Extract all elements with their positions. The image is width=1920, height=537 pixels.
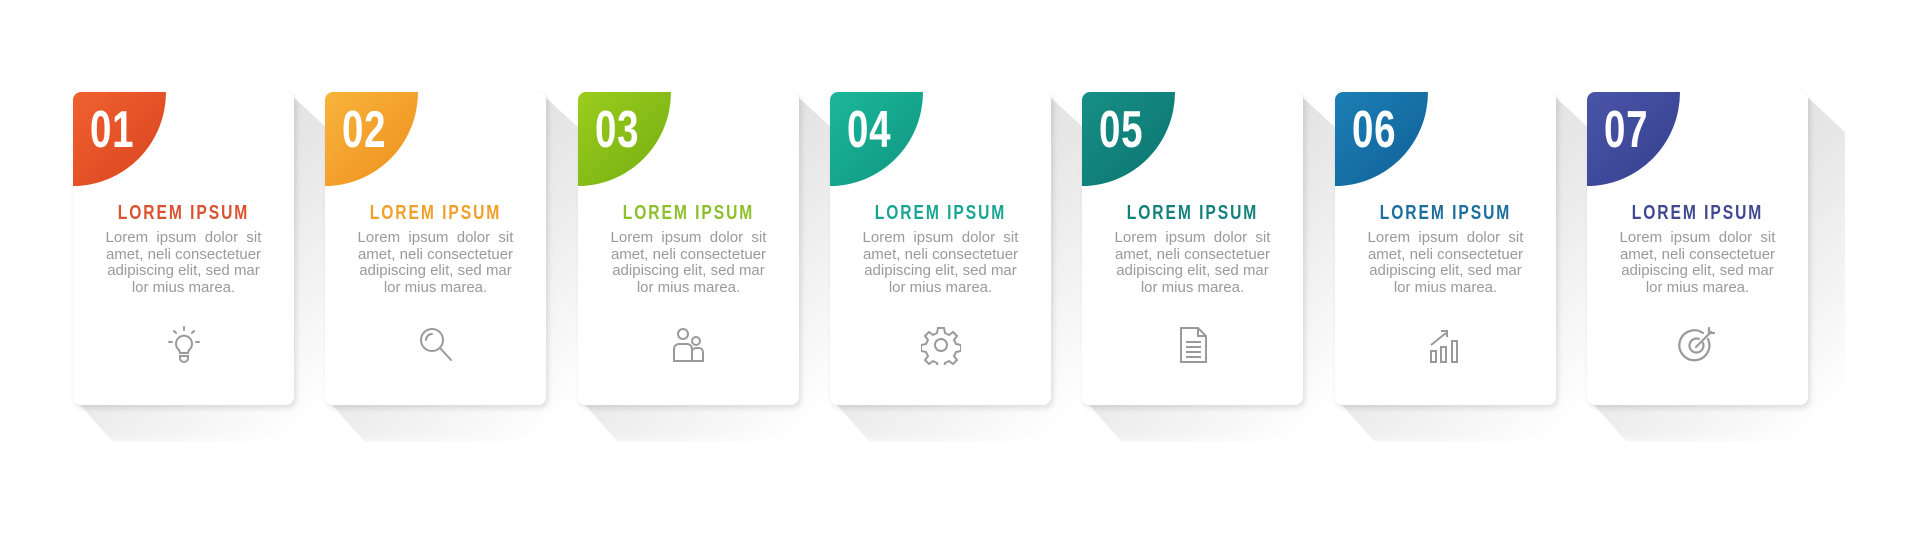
text 02: amet, neli consectetuer [358,246,513,262]
step 06 [1335,92,1587,442]
icon: gear [921,327,961,365]
icon: document [1180,327,1207,363]
icon: bar chart [1430,330,1458,363]
text 06: Lorem ipsum dolor sit [1368,229,1523,246]
text 03 [611,229,766,296]
text 06: amet, neli consectetuer [1368,246,1523,262]
icon: target [1678,326,1715,362]
text 01: amet, neli consectetuer [106,246,261,262]
heading 06: LOREM IPSUM [1380,202,1511,224]
step 02 [325,92,578,442]
text 02: adipiscing elit, sed mar [359,262,512,279]
step 01 [73,92,325,442]
number tab 03 [578,92,671,186]
text 03: adipiscing elit, sed mar [612,262,765,279]
text 06: adipiscing elit, sed mar [1369,262,1522,279]
number tab 06 [1335,92,1428,186]
number tab 01: 01 [90,101,134,159]
text 07 [1620,229,1776,296]
text 05: Lorem ipsum dolor sit [1115,229,1270,246]
text 04 [863,229,1018,296]
icon: lightbulb [168,326,200,363]
number tab 01 [73,92,166,186]
text 02: lor mius marea. [384,278,487,296]
text 07: adipiscing elit, sed mar [1621,262,1774,279]
text 01: Lorem ipsum dolor sit [106,229,261,246]
text 04: adipiscing elit, sed mar [864,262,1017,279]
text 06: lor mius marea. [1394,278,1497,296]
number tab 02: 02 [342,101,386,159]
card 03 [578,92,799,405]
text 02 [358,229,514,296]
heading 01: LOREM IPSUM [118,202,249,224]
text 05: amet, neli consectetuer [1115,246,1270,262]
number tab 02 [325,92,418,186]
text 02: Lorem ipsum dolor sit [358,229,513,246]
text 07: lor mius marea. [1646,278,1749,296]
text 04: lor mius marea. [889,278,992,296]
heading 07: LOREM IPSUM [1632,202,1763,224]
card 02 [325,92,546,405]
text 06 [1368,229,1524,296]
number tab 05 [1082,92,1175,186]
number tab 07 [1587,92,1680,186]
number tab 07: 07 [1604,101,1648,159]
number tab 04 [830,92,923,186]
text 07: amet, neli consectetuer [1620,246,1775,262]
step 03 [578,92,830,442]
heading 04: LOREM IPSUM [875,202,1006,224]
step 07 [1587,92,1845,442]
text 04: Lorem ipsum dolor sit [863,229,1018,246]
step 04 [830,92,1082,442]
card 01 [73,92,294,405]
number tab 03: 03 [595,101,639,159]
card 07 [1587,92,1808,405]
text 01 [106,229,262,296]
text 03: lor mius marea. [637,278,740,296]
text 01: lor mius marea. [132,278,235,296]
text 04: amet, neli consectetuer [863,246,1018,262]
text 07: Lorem ipsum dolor sit [1620,229,1775,246]
text 01: adipiscing elit, sed mar [107,262,260,279]
heading 03: LOREM IPSUM [623,202,754,224]
text 05 [1115,229,1270,296]
text 05: adipiscing elit, sed mar [1116,262,1269,279]
step 05 [1082,92,1335,442]
card 06 [1335,92,1556,405]
text 03: amet, neli consectetuer [611,246,766,262]
heading 05: LOREM IPSUM [1127,202,1258,224]
number tab 04: 04 [847,101,891,159]
number tab 06: 06 [1352,101,1396,159]
text 03: Lorem ipsum dolor sit [611,229,766,246]
card 05 [1082,92,1303,405]
card 04 [830,92,1051,405]
icon: users [673,328,704,362]
text 05: lor mius marea. [1141,278,1244,296]
icon: magnifier [420,328,452,361]
heading 02: LOREM IPSUM [370,202,501,224]
number tab 05: 05 [1099,101,1143,159]
